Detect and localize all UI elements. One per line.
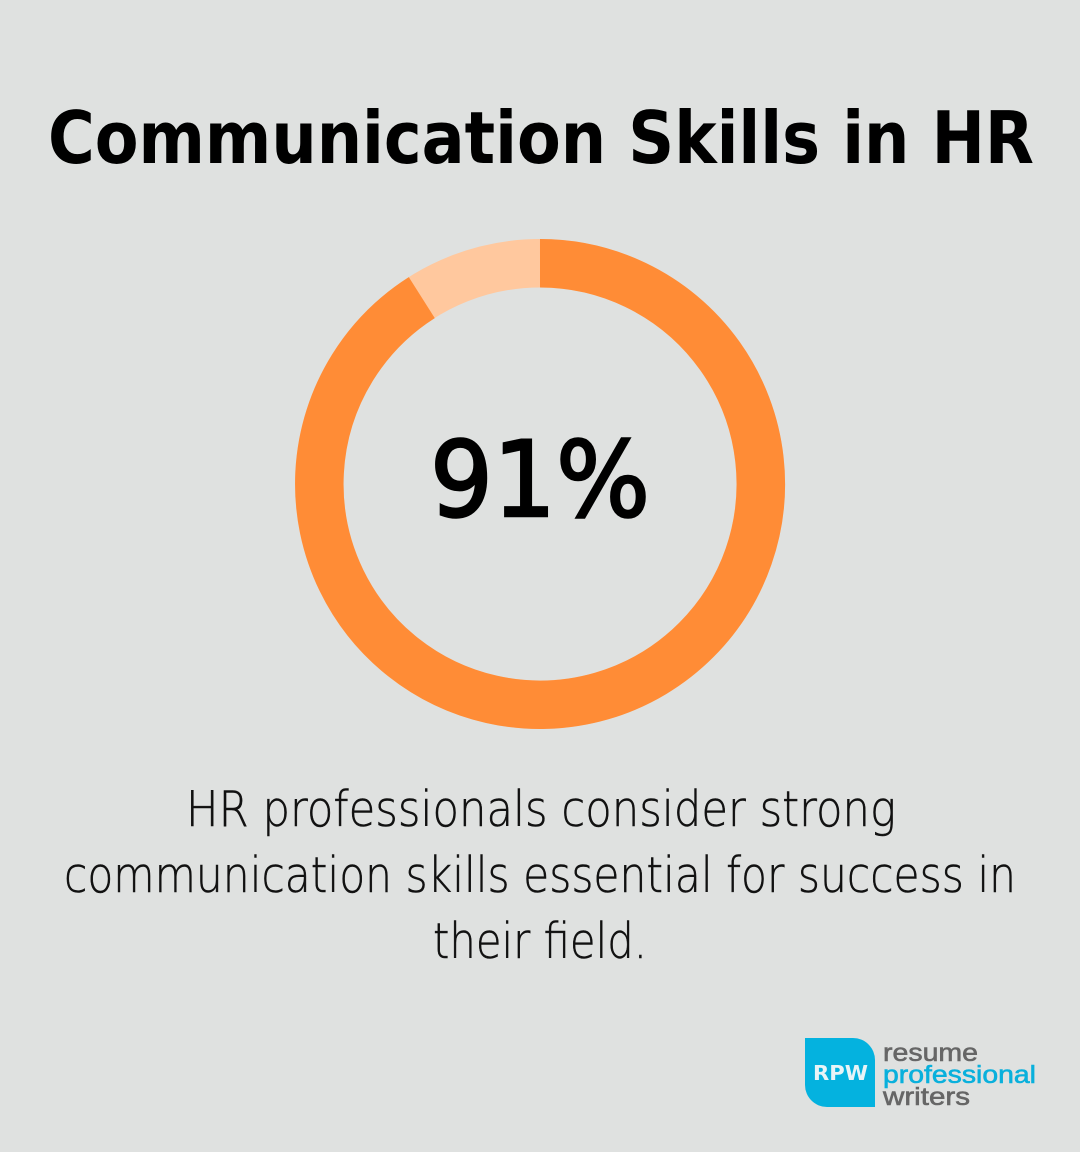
donut track: remaining 9% [319, 263, 761, 705]
description text: HR professionals consider strong [186, 781, 896, 838]
donut chart: 91% [319, 263, 761, 705]
logo badge [805, 1038, 875, 1107]
description text [64, 781, 1016, 970]
donut arc: 91% share [319, 263, 761, 705]
logo wordmark: writers: writers [882, 1083, 970, 1111]
central statistic: 91% [430, 419, 650, 541]
logo: resume professional writers [805, 1038, 1036, 1111]
logo wordmark: professional: professional [883, 1061, 1036, 1089]
description text: their field. [433, 913, 647, 970]
logo initials: RPW [813, 1061, 868, 1085]
logo wordmark: resume: resume [883, 1039, 978, 1067]
